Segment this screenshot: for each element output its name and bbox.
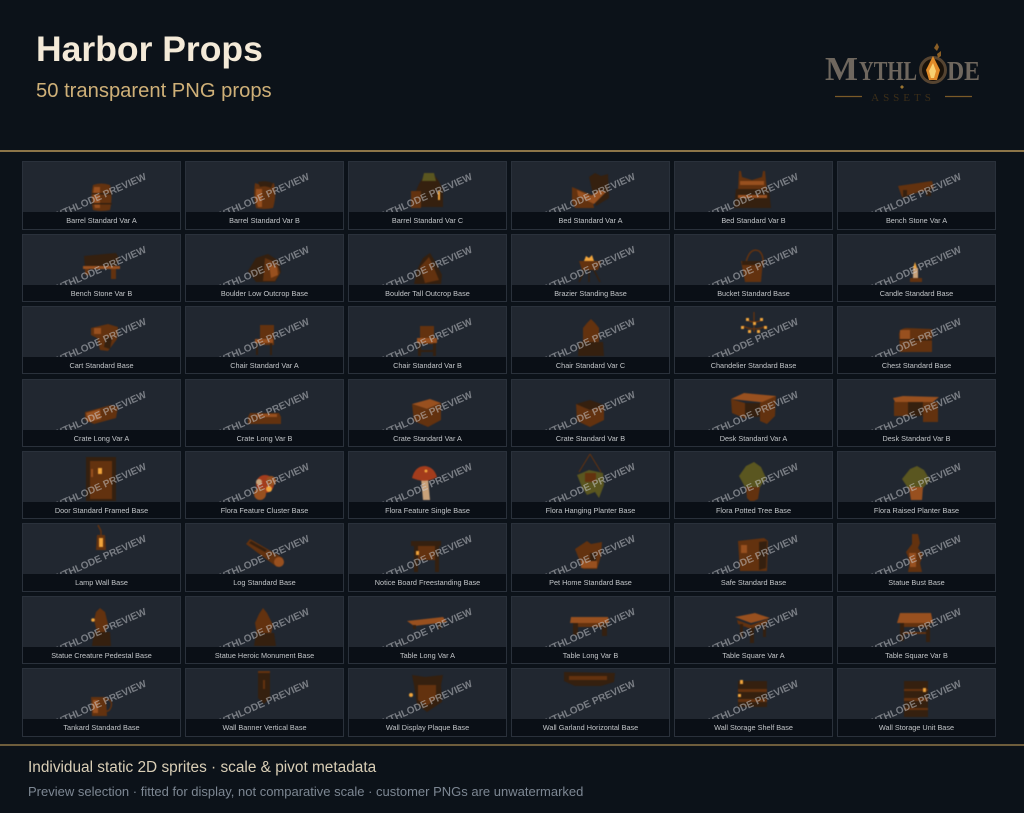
icon: chest: [899, 328, 932, 352]
icon: mushroom: [412, 466, 437, 500]
label: [186, 574, 343, 591]
label: Desk Standard Var A: [720, 434, 787, 443]
label: Table Long Var B: [563, 651, 618, 660]
icon: hanging planter: [577, 454, 604, 498]
card: Flora Raised Planter Base: [837, 451, 996, 519]
label: Chair Standard Var B: [393, 361, 462, 370]
label: [23, 430, 180, 447]
label: [675, 719, 832, 736]
label: [512, 502, 669, 519]
logo: Mythlode Assets: ASSETS: [871, 92, 935, 104]
label: [23, 502, 180, 519]
icon: throne: [578, 319, 604, 356]
logo: Mythlode Assets: [825, 43, 980, 104]
label: [23, 212, 180, 229]
label: Bench Stone Var B: [71, 289, 132, 298]
icon: chandelier: [741, 312, 767, 333]
card: Notice Board Freestanding Base: [348, 523, 507, 592]
label: [186, 357, 343, 374]
divider: footer: [0, 744, 1024, 746]
card: Crate Long Var B: [185, 379, 344, 447]
label: Crate Standard Var A: [393, 434, 462, 443]
label: Cart Standard Base: [69, 361, 134, 370]
card: Boulder Tall Outcrop Base: [348, 234, 507, 302]
icon: raised planter: [902, 466, 930, 500]
card: Flora Hanging Planter Base: [511, 451, 670, 519]
label: [512, 430, 669, 447]
icon: mossy barrel: [411, 173, 443, 208]
label: Boulder Low Outcrop Base: [221, 289, 308, 298]
icon: tankard: [91, 697, 111, 716]
logo: Mythlode Assets: DE: [947, 56, 980, 86]
label: [349, 719, 506, 736]
label: Barrel Standard Var C: [392, 216, 463, 225]
label: Desk Standard Var B: [882, 434, 950, 443]
card: Crate Standard Var A: [348, 379, 507, 447]
icon: wall lamp: [96, 525, 106, 550]
label: Wall Banner Vertical Base: [222, 723, 307, 732]
icon: long crate: [85, 405, 118, 424]
icon: chair: [255, 325, 274, 355]
label: Bench Stone Var A: [886, 216, 947, 225]
label: Statue Bust Base: [888, 578, 945, 587]
label: Barrel Standard Var A: [66, 216, 137, 225]
icon: desk: [893, 396, 939, 422]
label: Table Long Var A: [400, 651, 455, 660]
label: Flora Potted Tree Base: [716, 506, 791, 515]
label: Bed Standard Var A: [559, 216, 622, 225]
icon: creature statue: [91, 608, 111, 646]
label: [349, 212, 506, 229]
card: Cart Standard Base: [22, 306, 181, 374]
label: [838, 212, 995, 229]
label: [186, 430, 343, 447]
label: [23, 719, 180, 736]
icon: broken barrel: [254, 181, 275, 209]
subtitle: 50 transparent PNG props: [36, 80, 272, 102]
label: Wall Storage Shelf Base: [714, 723, 793, 732]
card: Bed Standard Var B: [674, 161, 833, 230]
card: Chest Standard Base: [837, 306, 996, 374]
icon: brazier: [579, 255, 601, 282]
label: Pet Home Standard Base: [549, 578, 632, 587]
icon: bust statue: [906, 534, 923, 572]
label: [512, 285, 669, 302]
label: Notice Board Freestanding Base: [375, 578, 480, 587]
icon: bucket: [741, 250, 763, 282]
label: [186, 212, 343, 229]
icon: heroic statue: [254, 608, 276, 646]
card: Flora Feature Cluster Base: [185, 451, 344, 519]
card: Table Long Var B: [511, 596, 670, 664]
card: Candle Standard Base: [837, 234, 996, 302]
label: [349, 647, 506, 664]
label: Bed Standard Var B: [721, 216, 786, 225]
label: Tankard Standard Base: [63, 723, 140, 732]
card: Bed Standard Var A: [511, 161, 670, 230]
icon: safe: [738, 538, 768, 571]
label: [838, 574, 995, 591]
label: Chest Standard Base: [882, 361, 951, 370]
label: Flora Feature Cluster Base: [221, 506, 308, 515]
label: [512, 357, 669, 374]
card: Tankard Standard Base: [22, 668, 181, 737]
label: [349, 285, 506, 302]
logo: Mythlode Assets: YTHL: [859, 56, 917, 86]
label: Log Standard Base: [233, 578, 296, 587]
label: Wall Display Plaque Base: [386, 723, 469, 732]
label: Door Standard Framed Base: [55, 506, 148, 515]
label: Wall Garland Horizontal Base: [543, 723, 638, 732]
icon: long crate low: [248, 413, 281, 424]
icon: tall boulder: [414, 253, 442, 284]
card: Crate Standard Var B: [511, 379, 670, 447]
label: [675, 574, 832, 591]
label: [838, 647, 995, 664]
label: Lamp Wall Base: [75, 578, 128, 587]
icon: potted tree: [739, 462, 766, 501]
icon: candle: [910, 262, 922, 282]
card: Table Square Var B: [837, 596, 996, 664]
label: [838, 357, 995, 374]
card: Log Standard Base: [185, 523, 344, 592]
title: Harbor Props: [36, 29, 263, 69]
label: Table Square Var A: [722, 651, 785, 660]
label: Crate Standard Var B: [556, 434, 625, 443]
label: [23, 647, 180, 664]
icon: pet home: [575, 541, 602, 569]
label: Table Square Var B: [885, 651, 948, 660]
icon: wall plaque: [409, 675, 443, 712]
icon: long table: [407, 617, 447, 629]
label: [349, 430, 506, 447]
label: [512, 212, 669, 229]
card: Wall Storage Shelf Base: [674, 668, 833, 737]
label: Statue Heroic Monument Base: [215, 651, 314, 660]
label: [23, 285, 180, 302]
label: [512, 574, 669, 591]
icon: ornate bed: [734, 171, 771, 208]
label: [838, 719, 995, 736]
label: [23, 357, 180, 374]
icon: flora cluster: [254, 475, 276, 500]
label: [675, 647, 832, 664]
label: Wall Storage Unit Base: [879, 723, 954, 732]
card: Brazier Standing Base: [511, 234, 670, 302]
card: Wall Storage Unit Base: [837, 668, 996, 737]
card: Statue Bust Base: [837, 523, 996, 592]
label: Flora Raised Planter Base: [874, 506, 959, 515]
label: [512, 647, 669, 664]
card: Table Square Var A: [674, 596, 833, 664]
card: Bench Stone Var A: [837, 161, 996, 230]
label: [838, 502, 995, 519]
icon: square table: [897, 613, 933, 642]
icon: wall shelf: [738, 680, 767, 707]
label: Crate Long Var B: [237, 434, 292, 443]
label: Crate Long Var A: [74, 434, 129, 443]
card: Wall Display Plaque Base: [348, 668, 507, 737]
card: Bucket Standard Base: [674, 234, 833, 302]
label: Flora Feature Single Base: [385, 506, 470, 515]
label: [349, 574, 506, 591]
label: [675, 285, 832, 302]
card: Safe Standard Base: [674, 523, 833, 592]
card: Door Standard Framed Base: [22, 451, 181, 519]
label: Flora Hanging Planter Base: [546, 506, 635, 515]
icon: log: [246, 539, 284, 567]
card: Lamp Wall Base: [22, 523, 181, 592]
card: Desk Standard Var A: [674, 379, 833, 447]
icon: barrel: [92, 184, 112, 211]
icon: door: [86, 457, 116, 501]
icon: chair: [417, 326, 437, 356]
icon: crate: [412, 399, 441, 427]
icon: crate: [576, 400, 604, 427]
card: Barrel Standard Var A: [22, 161, 181, 230]
card: Chandelier Standard Base: [674, 306, 833, 374]
icon: square table: [735, 613, 770, 643]
icon: cart: [91, 324, 118, 351]
label: [186, 719, 343, 736]
card: Wall Banner Vertical Base: [185, 668, 344, 737]
card: Table Long Var A: [348, 596, 507, 664]
label: Safe Standard Base: [721, 578, 786, 587]
icon: low boulder: [248, 254, 281, 282]
label: Brazier Standing Base: [554, 289, 627, 298]
card: Statue Creature Pedestal Base: [22, 596, 181, 664]
card: Flora Feature Single Base: [348, 451, 507, 519]
label: Bucket Standard Base: [717, 289, 790, 298]
icon: desk: [731, 393, 776, 424]
card: Wall Garland Horizontal Base: [511, 668, 670, 737]
card: Flora Potted Tree Base: [674, 451, 833, 519]
card: Boulder Low Outcrop Base: [185, 234, 344, 302]
card: Crate Long Var A: [22, 379, 181, 447]
card: Statue Heroic Monument Base: [185, 596, 344, 664]
icon: stone bench: [898, 181, 934, 198]
icon: wall banner: [258, 671, 270, 704]
card: Pet Home Standard Base: [511, 523, 670, 592]
card: Chair Standard Var C: [511, 306, 670, 374]
label: [186, 502, 343, 519]
icon: bed: [572, 173, 609, 208]
label: Boulder Tall Outcrop Base: [385, 289, 470, 298]
label: Chair Standard Var A: [230, 361, 299, 370]
label: [675, 502, 832, 519]
label: [512, 719, 669, 736]
card: Desk Standard Var B: [837, 379, 996, 447]
label: [349, 357, 506, 374]
label: [838, 430, 995, 447]
card: Chair Standard Var A: [185, 306, 344, 374]
label: [675, 212, 832, 229]
logo: Mythlode Assets: M: [825, 51, 858, 88]
icon: long table: [570, 617, 609, 636]
card: Barrel Standard Var B: [185, 161, 344, 230]
icon: wall storage unit: [904, 681, 928, 717]
icon: wall garland: [564, 672, 615, 686]
label: Barrel Standard Var B: [229, 216, 300, 225]
label: [349, 502, 506, 519]
label: Chair Standard Var C: [556, 361, 625, 370]
label: [838, 285, 995, 302]
label: Candle Standard Base: [880, 289, 953, 298]
label: [186, 647, 343, 664]
card: Barrel Standard Var C: [348, 161, 507, 230]
label: [675, 357, 832, 374]
label: [23, 574, 180, 591]
icon: carved bench: [83, 253, 120, 279]
label: [186, 285, 343, 302]
label: Chandelier Standard Base: [711, 361, 796, 370]
icon: notice board: [411, 541, 441, 572]
label: [675, 430, 832, 447]
card: Chair Standard Var B: [348, 306, 507, 374]
footer secondary text: Preview selection · fitted for display, not comparative scale · customer PNGs are unwatermarked: [28, 784, 583, 799]
label: Statue Creature Pedestal Base: [51, 651, 152, 660]
footer primary text: Individual static 2D sprites · scale & pivot metadata: [28, 759, 376, 776]
card: Bench Stone Var B: [22, 234, 181, 302]
divider: header: [0, 150, 1024, 152]
